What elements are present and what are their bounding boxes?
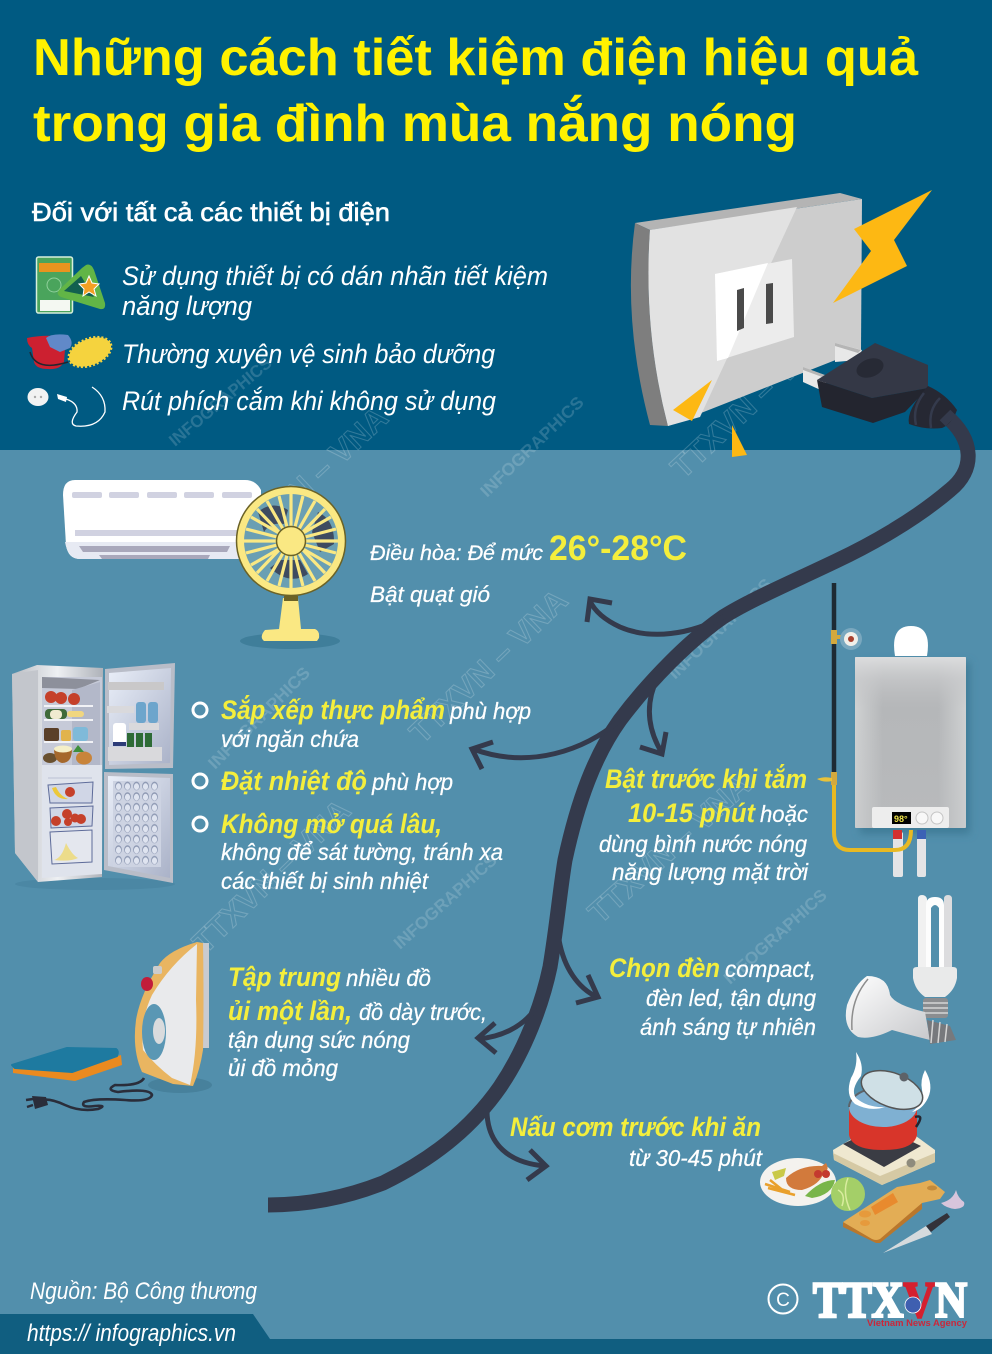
text: iron tip: ủi một lần,	[228, 996, 352, 1026]
text: unplug tip: Rút phích cắm khi không sử dụng	[122, 385, 496, 416]
text: lamp tip	[609, 953, 816, 1040]
iron body	[135, 942, 204, 1086]
icon: small spark lower	[732, 425, 747, 457]
text: air conditioner tip: 26°-28°C	[549, 529, 687, 568]
text: label tip	[122, 261, 548, 321]
heater pipes	[832, 583, 836, 772]
bullet	[193, 703, 207, 717]
reflector bulb	[846, 976, 956, 1044]
bullet	[193, 817, 207, 831]
arrow: to cooking	[487, 1108, 546, 1180]
text: iron tip: nhiều đồ	[346, 965, 431, 991]
iron white area	[142, 944, 197, 1085]
text: label tip: Sử dụng thiết bị có dán nhãn tiết kiệm	[122, 261, 548, 291]
watermarks: TTXVN – VNA	[664, 320, 838, 485]
illustration: water heater: 98°	[894, 814, 908, 824]
fridge interior	[42, 677, 102, 878]
text: fridge tip 1	[221, 694, 531, 752]
steam	[849, 1052, 885, 1109]
illustration: air conditioner	[63, 480, 261, 559]
illustration: water heater	[817, 583, 970, 877]
illustration: open refrigerator	[12, 663, 175, 890]
main cable	[268, 415, 968, 1205]
text: water heater tip	[599, 763, 809, 885]
knife	[883, 1226, 932, 1253]
text: fridge tip 1: phù hợp	[449, 698, 531, 724]
text: water heater tip: dùng bình nước nóng	[599, 831, 807, 857]
watermarks: INFOGRAPHICS	[665, 575, 776, 683]
icon: bucket and duster	[27, 332, 115, 372]
fridge door upper	[105, 663, 175, 769]
heater body	[855, 657, 966, 828]
door shelves and bottles	[107, 682, 164, 761]
text: cooking tip: từ 30-45 phút	[629, 1145, 764, 1171]
website url: https:// infographics.vn	[27, 1320, 236, 1347]
heater flue	[894, 626, 928, 656]
cutting board	[843, 1203, 922, 1243]
title	[33, 29, 919, 153]
folded clothes	[13, 1055, 122, 1081]
watermarks: INFOGRAPHICS	[390, 851, 501, 953]
icon: large lightning bolt	[833, 190, 932, 303]
text: water heater tip: năng lượng mặt trời	[612, 859, 809, 885]
text: cooking tip: Nấu cơm trước khi ăn	[510, 1112, 761, 1142]
text: air conditioner tip: Điều hòa: Để mức	[370, 542, 544, 565]
text: lamp tip: Chọn đèn	[609, 953, 720, 983]
illustration: energy saving lamps	[846, 895, 957, 1044]
socket face	[648, 199, 862, 426]
illustration: cooking set	[760, 1052, 964, 1253]
outlet plate highlight	[715, 263, 768, 361]
text: lamp tip: đèn led, tận dụng	[646, 985, 816, 1011]
text: label tip: năng lượng	[122, 291, 252, 321]
iron cord	[42, 1078, 152, 1110]
plate of food	[760, 1158, 836, 1206]
outlet slot right	[766, 283, 773, 324]
text: iron tip	[228, 962, 487, 1081]
agency wordmark: TTXVN	[813, 1273, 967, 1329]
arrow: to fridge	[472, 720, 620, 769]
list: refrigerator tips	[193, 694, 531, 894]
text: water heater tip: hoặc	[760, 801, 808, 827]
text: iron tip: đồ dày trước,	[359, 999, 487, 1025]
text: water heater tip: 10-15 phút	[628, 798, 756, 828]
text: fridge tip 2	[221, 766, 453, 796]
compact bulb	[913, 895, 957, 1018]
icon: energy label	[36, 257, 105, 313]
agency tagline: Vietnam News Agency	[867, 1318, 967, 1328]
outlet slot left	[737, 288, 744, 331]
panel: top header band	[0, 0, 992, 450]
illustration: fan	[236, 486, 346, 649]
watermarks	[165, 320, 838, 988]
socket side edge	[631, 223, 668, 426]
watermarks: TTXVN – VNA	[581, 767, 757, 930]
text: iron tip: Tập trung	[228, 962, 341, 992]
carrot	[871, 1193, 898, 1215]
iron button	[141, 977, 153, 991]
text: lamp tip: ánh sáng tự nhiên	[640, 1014, 816, 1040]
globe	[905, 1297, 921, 1313]
red pot	[849, 1107, 917, 1150]
text: fridge tip 3	[221, 809, 503, 894]
title: trong gia đình mùa nắng nóng	[33, 94, 797, 153]
text: iron tip: tận dụng sức nóng	[228, 1027, 410, 1053]
fridge cabinet	[12, 665, 103, 882]
fridge door lower	[104, 772, 173, 883]
text: fridge tip 3: không để sát tường, tránh xa	[221, 839, 503, 865]
bullet	[193, 774, 207, 788]
stove	[833, 1128, 935, 1185]
watermarks: TTXVN – VNA	[221, 400, 395, 565]
source text: Nguồn: Bộ Công thương	[30, 1278, 258, 1305]
iron sole	[202, 943, 209, 1048]
control panel	[872, 807, 949, 828]
icon: socket and unplugged cord	[28, 387, 105, 426]
socket highlight	[648, 207, 797, 426]
text: cleaning tip: Thường xuyên vệ sinh bảo dưỡng	[122, 339, 495, 369]
cabbage	[831, 1177, 865, 1211]
copyright mark	[768, 1284, 798, 1314]
text: lamp tip: compact,	[725, 956, 816, 982]
arrow: to air conditioner	[587, 599, 725, 634]
iron window	[142, 1004, 166, 1060]
watermarks: TTXVN – VNA	[403, 582, 574, 750]
text: fridge tip 1: với ngăn chứa	[221, 726, 359, 752]
watermarks: TTXVN – VNA	[186, 792, 357, 960]
arrow: to lamps	[559, 940, 598, 1003]
subtitle: Đối với tất cả các thiết bị điện	[32, 197, 390, 227]
display	[892, 812, 911, 824]
logo: TTXVN	[768, 1273, 967, 1329]
text: air conditioner tip: Bật quạt gió	[370, 582, 490, 607]
text: fridge tip 3: Không mở quá lâu,	[221, 809, 442, 839]
text: cooking tip	[510, 1112, 764, 1171]
illustration: wall socket with lightning	[631, 190, 932, 457]
text: air conditioner tip	[370, 529, 687, 607]
arrow: to iron	[478, 1008, 536, 1053]
watermarks: INFOGRAPHICS	[720, 886, 831, 988]
watermarks: INFOGRAPHICS	[477, 393, 588, 501]
outlet plate	[715, 259, 794, 361]
socket top edge	[635, 193, 862, 230]
list: all appliances tips	[27, 257, 548, 426]
watermarks: INFOGRAPHICS	[165, 353, 276, 450]
text: water heater tip: Bật trước khi tắm	[605, 763, 807, 794]
text: fridge tip 2: Đặt nhiệt độ	[221, 766, 367, 796]
garlic	[941, 1190, 964, 1209]
icon: small spark	[673, 380, 712, 421]
watermarks: INFOGRAPHICS	[204, 663, 314, 773]
title: Những cách tiết kiệm điện hiệu quả	[33, 29, 919, 87]
text: iron tip: ủi đồ mỏng	[228, 1055, 338, 1081]
illustration: iron and folded clothes	[12, 942, 212, 1110]
text: fridge tip 2: phù hợp	[371, 769, 453, 795]
text: fridge tip 1: Sắp xếp thực phẩm	[221, 694, 445, 725]
arrow: to water heater	[640, 686, 666, 754]
footer band	[0, 1314, 992, 1354]
illustration: plug	[803, 343, 957, 428]
fridge food	[43, 691, 93, 864]
copyright mark: C	[776, 1290, 790, 1311]
text: fridge tip 3: các thiết bị sinh nhiệt	[221, 868, 430, 894]
pot lid	[856, 1063, 928, 1117]
